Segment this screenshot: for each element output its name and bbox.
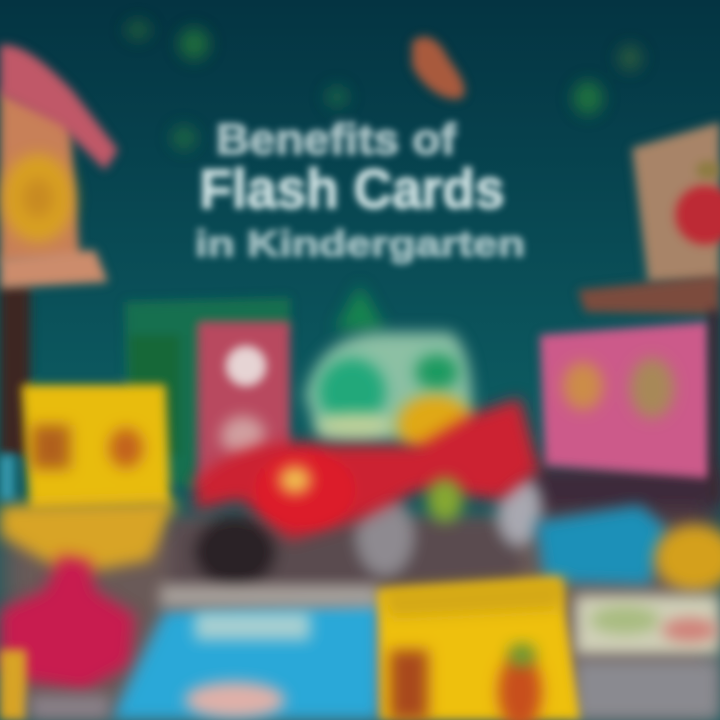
green triangle	[335, 285, 385, 330]
floor right	[575, 595, 720, 720]
title: Flash Cards	[200, 157, 504, 220]
title: in Kindergarten	[195, 223, 525, 264]
icon: orange leaf	[412, 37, 465, 99]
yellow block foreground	[378, 578, 580, 720]
red toy	[195, 398, 540, 540]
yellow corner block	[0, 650, 26, 720]
pale strip behind mat	[160, 585, 380, 607]
birdhouse left	[0, 45, 118, 455]
dark area lower centre	[170, 475, 542, 590]
blue card right	[535, 505, 668, 585]
yellow toy right	[655, 525, 720, 591]
apple	[675, 185, 720, 245]
pink toy left	[0, 555, 135, 690]
yellow block left	[0, 385, 178, 575]
post	[0, 285, 30, 455]
apple card right	[578, 122, 720, 315]
card	[632, 122, 720, 282]
lower backdrop	[0, 470, 720, 720]
yellow round hole	[2, 154, 74, 242]
base	[0, 250, 108, 288]
green box back	[125, 298, 290, 490]
red-pink card	[198, 322, 290, 487]
shelf	[578, 275, 720, 315]
blue mat	[110, 600, 380, 720]
pink board right	[535, 310, 720, 505]
pale card centre	[305, 332, 472, 440]
house body	[0, 90, 80, 262]
floor bottom left	[30, 695, 110, 720]
title	[195, 115, 525, 264]
decorative blurred dots	[126, 20, 642, 150]
leaf	[696, 161, 720, 179]
title: Benefits of	[216, 115, 456, 164]
yellow-orange blob	[397, 395, 473, 455]
roof	[0, 45, 118, 170]
small blue edge left	[0, 455, 14, 500]
